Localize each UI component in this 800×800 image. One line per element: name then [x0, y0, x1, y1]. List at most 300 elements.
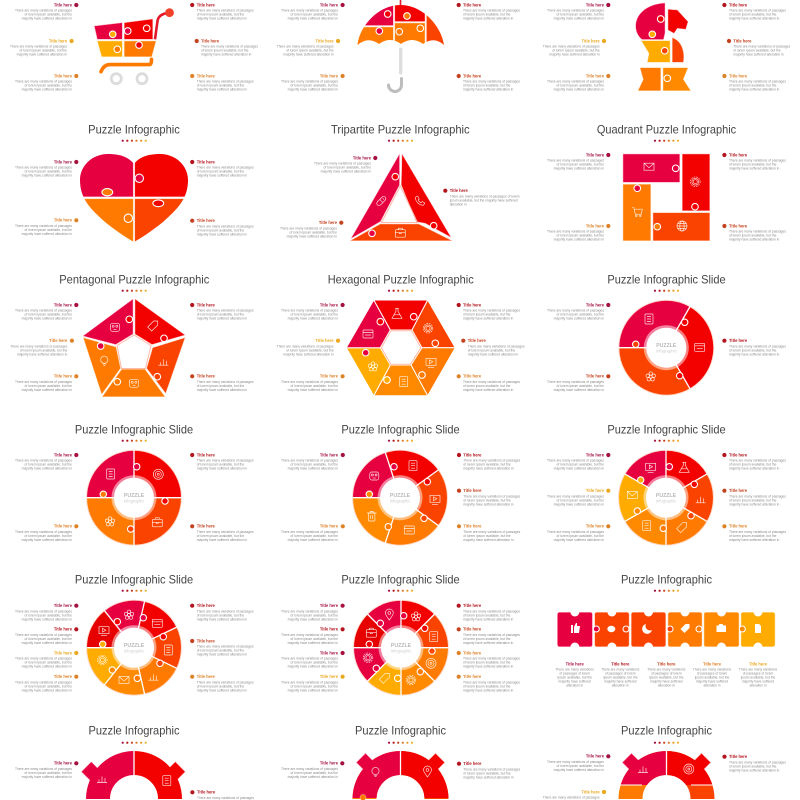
text block: left top: There are many variations of passages [281, 309, 338, 313]
text block: left 1: There are many variations of passages [281, 609, 338, 613]
panel: four part ring [15, 422, 254, 546]
icon: list [409, 461, 417, 471]
text block: right 2: of lorem ipsum available, but the [197, 649, 244, 653]
text block: right top [722, 452, 786, 471]
text block: left bottom: of lorem ipsum available, but the [557, 84, 604, 88]
text block: left bottom: There are many variations of passages [281, 380, 338, 384]
text block: left top [547, 452, 610, 471]
text block: left top: majority have suffered alteration in [554, 467, 604, 471]
text block: left 3: Title here [54, 650, 73, 655]
icon: grid [148, 674, 158, 680]
heading: Puzzle Infographic Slide [607, 422, 726, 436]
heading: Hexagonal Puzzle Infographic [328, 272, 474, 286]
text block: left middle: There are many variations of passages [543, 45, 600, 49]
label: step 2: There are many variations [601, 667, 640, 671]
text block: right 4: There are many variations of passages [463, 680, 520, 684]
text block: right top: of lorem ipsum available, but the [197, 313, 244, 317]
text block: bottom left: majority have suffered alteration in [287, 234, 337, 238]
text block: right bottom [457, 524, 521, 542]
text block: right top: of lorem ipsum available, but the [463, 13, 511, 17]
text block: left 1: of lorem ipsum available, but the [291, 613, 338, 617]
heading: Quadrant Puzzle Infographic [597, 122, 736, 136]
text block: right: alteration in [450, 202, 467, 206]
text block: right 1: majority have suffered alteration in [197, 617, 247, 621]
icon: briefcase [152, 518, 162, 527]
text block: left 1 [281, 603, 345, 621]
text block: right 2: of lorem ipsum available, but the [463, 637, 511, 641]
text block: left top: of lorem ipsum available, but the [25, 13, 72, 17]
text block: left bottom [547, 223, 610, 242]
text block: right 1: Title here [463, 603, 482, 608]
text block: left 3: There are many variations of passages [15, 657, 72, 661]
text block: right bottom: Title here [197, 73, 216, 78]
text block: left middle: of lorem ipsum available, but the [20, 348, 67, 352]
text block: right top: There are many variations of passages [463, 459, 521, 463]
label: step 4 [693, 661, 731, 687]
panel: shopping cart puzzle [10, 2, 258, 92]
text block: left middle: majority have suffered alteration in [283, 53, 334, 57]
heading: Puzzle Infographic [621, 572, 712, 586]
text block: left 4: Title here [320, 674, 339, 679]
text block: right top: There are many variations of passages [197, 309, 254, 313]
text block: right middle: majority have suffered alteration in [733, 53, 784, 57]
pentagon chart [83, 299, 185, 397]
heading dots [388, 742, 413, 744]
text block: left top: of lorem ipsum available, but the [25, 463, 72, 467]
icon: gear [690, 177, 700, 186]
text block: right top: of lorem ipsum available, but the [729, 13, 777, 17]
text block: left 1 [15, 603, 78, 621]
text block: left bottom [547, 73, 610, 92]
text block: left top: of lorem ipsum available, but the [557, 463, 604, 467]
text block: left bottom: Title here [54, 524, 73, 529]
ring chart: Infographic [124, 648, 144, 653]
ring chart [86, 450, 182, 546]
text block: right [722, 338, 786, 356]
text block: right middle: Title here [733, 38, 752, 43]
text block: left middle [10, 38, 74, 57]
text block: left top: There are many variations of passages [547, 159, 604, 163]
text block: left middle: There are many variations of passages [10, 344, 68, 348]
text block: right top: Title here [197, 452, 216, 457]
text block: right bottom [190, 218, 254, 236]
text block: right top: of lorem ipsum available, but the [463, 313, 511, 317]
text block: right top: Title here [463, 2, 482, 7]
text block: right bottom: of lorem ipsum available, but the [197, 228, 244, 232]
text block: left top: of lorem ipsum available, but the [557, 13, 604, 17]
text block: left top: majority have suffered alteration in [554, 17, 604, 21]
text block: right bottom: Title here [463, 524, 482, 529]
text block: left bottom: of lorem ipsum available, but the [291, 384, 338, 388]
text block: right 3 [190, 674, 254, 692]
text block: right top: Title here [463, 302, 482, 307]
icon: face lower [130, 379, 138, 387]
panel: arch puzzle right [543, 723, 786, 800]
text block: right top: majority have suffered alteration in [729, 167, 780, 171]
text block: left 4: There are many variations of passages [15, 680, 72, 684]
text block: left 3: of lorem ipsum available, but the [25, 661, 72, 665]
label: step 4: majority have suffered [696, 679, 728, 683]
text block: right bottom: Title here [729, 524, 748, 529]
ring chart [86, 600, 182, 695]
text block: left 2: Title here [54, 627, 73, 632]
text block: right 1 [190, 603, 254, 621]
text block: right top: of lorem ipsum available, but the [197, 170, 244, 174]
label: step 1: majority have suffered [559, 679, 591, 683]
text block: right middle: majority have suffered alteration in [201, 53, 252, 57]
icon: face [110, 323, 120, 331]
text block: right top: There are many variations of passages [197, 459, 254, 463]
text block: left top: There are many variations of passages [15, 166, 72, 170]
icon: tag [148, 321, 158, 331]
heading: Puzzle Infographic Slide [341, 572, 460, 586]
text block: left top: Title here [586, 302, 605, 307]
icon: growth chart [638, 766, 648, 772]
icon: flower [646, 372, 655, 381]
text block: left middle [543, 38, 606, 57]
text block: left middle: majority have suffered alteration in [554, 502, 604, 506]
text block: left bottom: of lorem ipsum available, but the [25, 228, 72, 232]
heading: Puzzle Infographic Slide [341, 422, 460, 436]
panel: five part ring [281, 422, 521, 545]
heading dots [122, 440, 147, 442]
heading: Puzzle Infographic Slide [607, 272, 726, 286]
icon: piggy bank [607, 626, 615, 632]
text block: right top: of lorem ipsum available, but the [197, 463, 244, 467]
text block: left top: of lorem ipsum available, but the [557, 163, 604, 167]
text block: left top: There are many variations of passages [15, 309, 72, 313]
label: step 1: alteration in [566, 683, 583, 687]
umbrella canopy [355, 0, 446, 47]
text block: right bottom [190, 524, 254, 542]
text block: left bottom: Title here [586, 223, 605, 228]
text block: right 4: majority have suffered alteration in [463, 688, 514, 692]
text block: left middle: majority have suffered alteration in [549, 53, 600, 57]
text block: left 3: Title here [320, 650, 339, 655]
text block: left middle [277, 38, 340, 57]
text block: left middle [277, 338, 340, 356]
text block: right bottom: of lorem ipsum available, but the [463, 534, 511, 538]
heading dots [388, 440, 413, 442]
text block: left 1: majority have suffered alteration in [288, 617, 338, 621]
panel: quadrant puzzle [547, 122, 786, 242]
text block: left top: There are many variations of passages [547, 459, 604, 463]
icon: moon [642, 624, 652, 634]
text block: left 3 [15, 650, 78, 669]
heading dots [388, 140, 413, 142]
text block: left 2 [281, 627, 345, 645]
icon: window [404, 526, 414, 534]
text block: right middle: of lorem ipsum available, but the [468, 348, 515, 352]
text block: left bottom [15, 73, 78, 92]
text block: right middle [722, 488, 786, 506]
ring chart [352, 450, 448, 545]
text block: right middle: There are many variations of passages [463, 494, 521, 498]
text block: left top: There are many variations of passages [547, 9, 604, 13]
label: step 4: There are many variations [693, 667, 731, 671]
text block: right top: majority have suffered alteration in [729, 467, 780, 471]
text block: right bottom: There are many variations of passages [729, 530, 786, 534]
text block: right top: of lorem ipsum available, but the [729, 163, 777, 167]
text block: right 4: of lorem ipsum available, but the [463, 684, 511, 688]
text block: right bottom: of lorem ipsum available, but the [197, 534, 244, 538]
icon: camera [98, 655, 107, 665]
text block: left top: majority have suffered alteration in [22, 17, 72, 21]
text block: left top [547, 754, 610, 772]
text block: right top: majority have suffered alteration in [197, 174, 247, 178]
text block: right top [190, 302, 254, 321]
text block: right bottom: majority have suffered alteration in [197, 88, 247, 92]
text block: right top: Title here [729, 2, 748, 7]
arch chart [81, 750, 185, 800]
heading dots [122, 742, 147, 744]
text block: right middle: of lorem ipsum available, but the [463, 498, 511, 502]
icon: trash [367, 512, 376, 521]
text block: left bottom: of lorem ipsum available, but the [25, 84, 72, 88]
knight figure [636, 3, 691, 91]
text block: right: majority have suffered alteration in [463, 775, 514, 779]
label: step 3 [647, 661, 686, 687]
icon: document [430, 632, 438, 642]
text block: right 2: majority have suffered alteration in [197, 653, 247, 657]
text block: left middle: of lorem ipsum available, but the [286, 348, 334, 352]
icon: document [164, 645, 172, 655]
text block: right 2: Title here [197, 638, 216, 643]
text block: left bottom: Title here [54, 374, 73, 379]
text block: right top: majority have suffered alteration in [463, 317, 514, 321]
panel: three part ring [547, 272, 786, 395]
text block: right top [457, 2, 520, 21]
text block: left bottom: There are many variations of passages [281, 530, 338, 534]
panel: eight part ring [281, 572, 520, 696]
text block: right top: of lorem ipsum available, but the [463, 463, 511, 467]
text block: right top: majority have suffered alteration in [197, 467, 247, 471]
text block: right bottom: majority have suffered alteration in [463, 538, 514, 542]
text block: left top: of lorem ipsum available, but the [557, 764, 604, 768]
text block: left: There are many variations of passages [281, 767, 338, 771]
label: step 4: of passages of lorem [697, 671, 728, 675]
ring chart: Infographic [656, 498, 676, 503]
text block: right top: Title here [197, 302, 216, 307]
text block: left top: Title here [320, 302, 339, 307]
ring chart: Infographic [390, 498, 410, 503]
text block: left lower: There are many variations of passages [543, 796, 600, 800]
puzzle chain [557, 608, 775, 652]
text block: right: There are many variations of passages [729, 344, 786, 348]
icon: monitor [99, 627, 109, 636]
text block: left middle: of lorem ipsum available, but the [552, 49, 600, 53]
text block: left top: There are many variations of passages [281, 9, 338, 13]
text block: right bottom: majority have suffered alteration in [197, 232, 247, 236]
text block: left top: of lorem ipsum available, but the [291, 463, 338, 467]
icon: flask [392, 308, 402, 318]
heading: Tripartite Puzzle Infographic [331, 122, 470, 136]
text block: left bottom: majority have suffered alteration in [554, 238, 604, 242]
text block: right middle [195, 38, 258, 57]
text block: right bottom: Title here [729, 223, 748, 228]
label: step 3: alteration in [658, 683, 675, 687]
text block: right bottom [722, 223, 786, 242]
panel: arch puzzle left [15, 723, 254, 800]
panel: chess knight puzzle [543, 2, 791, 92]
text block: left 3: majority have suffered alteration in [288, 665, 338, 669]
text block: left top: There are many variations of passages [547, 309, 604, 313]
text block: right 2: There are many variations of passages [463, 633, 520, 637]
icon: mail [644, 163, 654, 170]
text block: right 2 [190, 638, 254, 657]
text block: left top: There are many variations of passages [15, 9, 72, 13]
text block: right middle [457, 488, 521, 506]
text block: right top [190, 452, 254, 471]
text block: left top: majority have suffered alteration in [554, 317, 604, 321]
ring knobs [632, 319, 688, 379]
text block: right top [190, 2, 254, 21]
text block: right [722, 754, 786, 772]
text block: left: Title here [54, 761, 73, 766]
icon: chart [158, 359, 168, 365]
text block: left 2: of lorem ipsum available, but the [291, 637, 338, 641]
text block: left bottom [15, 218, 78, 236]
heading: Puzzle Infographic Slide [75, 422, 193, 436]
text block: left 1: majority have suffered alteration in [22, 617, 72, 621]
text block: left top [281, 2, 345, 21]
heading: Pentagonal Puzzle Infographic [59, 272, 209, 286]
text block: left bottom: of lorem ipsum available, but the [291, 534, 338, 538]
text block: left bottom [281, 524, 345, 542]
label: step 5: There are many variations [739, 667, 777, 671]
text block: bottom left: There are many variations of passages [280, 226, 337, 230]
heading dots [122, 290, 147, 292]
icon: document [107, 469, 115, 479]
text block: right middle: There are many variations of passages [729, 494, 786, 498]
label: step 2: of passages of lorem [605, 671, 636, 675]
icon: play [646, 463, 656, 472]
text block: top left: majority have suffered alteration in [321, 170, 371, 174]
text block: left top: majority have suffered alteration in [554, 167, 604, 171]
text block: left bottom: majority have suffered alteration in [22, 388, 72, 392]
panel: seven part ring [15, 572, 254, 695]
text block: right top: Title here [197, 2, 216, 7]
text block: left 4: There are many variations of passages [281, 680, 338, 684]
text block: left top: There are many variations of passages [281, 459, 338, 463]
text block: left top: Title here [54, 302, 73, 307]
text block: left bottom [15, 524, 78, 542]
text block: left bottom: of lorem ipsum available, but the [291, 84, 338, 88]
text block: left top: of lorem ipsum available, but the [25, 170, 72, 174]
text block: right top: majority have suffered alteration in [197, 317, 247, 321]
text block: right top: There are many variations of passages [729, 159, 786, 163]
heading dots [654, 290, 679, 292]
text block: right bottom: majority have suffered alteration in [463, 388, 514, 392]
text block: left middle: of lorem ipsum available, but the [557, 498, 604, 502]
text block: left bottom [281, 374, 345, 392]
text block: right: There are many variations of passages [729, 760, 786, 764]
text block: left top: majority have suffered alteration in [554, 768, 604, 772]
heading dots [654, 140, 679, 142]
ring chart: PUZZLE [124, 493, 145, 499]
text block: left bottom [15, 374, 78, 392]
label: step 2: alteration in [612, 683, 629, 687]
ring chart [353, 600, 449, 696]
text block: left 4 [15, 674, 78, 692]
text block: left bottom: of lorem ipsum available, but the [557, 534, 604, 538]
icon: window [152, 619, 162, 627]
text block: left middle: Title here [586, 488, 605, 493]
text block: left bottom: There are many variations of passages [15, 80, 72, 84]
text block: left top: of lorem ipsum available, but the [291, 313, 338, 317]
icon: target [426, 658, 436, 668]
text block: right top [457, 452, 521, 471]
panel: pentagonal puzzle [10, 272, 254, 397]
text block: right middle: Title here [201, 38, 220, 43]
text block: right middle: There are many variations of passages [468, 344, 525, 348]
text block: bottom left: of lorem ipsum available, but the [290, 230, 337, 234]
text block: left top [281, 452, 345, 471]
label: step 4: alteration in [703, 683, 721, 687]
panel: six part ring [547, 422, 786, 546]
text block: right bottom: There are many variations of passages [729, 230, 786, 234]
text block: right: Title here [729, 338, 748, 343]
umbrella handle [388, 49, 402, 92]
text block: right bottom: of lorem ipsum available, but the [197, 84, 244, 88]
text block: left top: Title here [586, 152, 605, 157]
text block: left middle: There are many variations of passages [277, 45, 334, 49]
text block: right middle: Title here [729, 488, 748, 493]
text block: left [15, 761, 78, 779]
ring chart: PUZZLE [656, 493, 677, 499]
text block: right top: of lorem ipsum available, but the [197, 13, 244, 17]
icon: globe [677, 221, 687, 231]
icon: chart [97, 776, 107, 782]
text block: left bottom: of lorem ipsum available, but the [557, 234, 604, 238]
text block: right top: There are many variations of passages [197, 166, 254, 170]
text block: left 4: Title here [54, 674, 73, 679]
label: step 1: There are many variations [556, 667, 594, 671]
text block: right bottom: of lorem ipsum available, but the [729, 234, 777, 238]
text block: right 1: majority have suffered alteration in [463, 617, 514, 621]
icon: face [363, 653, 373, 662]
quadrant chart [623, 154, 710, 241]
text block: right top: of lorem ipsum available, but the [729, 463, 777, 467]
text block: left bottom: There are many variations of passages [15, 530, 72, 534]
text block: left top: Title here [54, 2, 73, 7]
text block: right middle [461, 338, 525, 356]
text block: left top [15, 2, 78, 21]
text block: right top: Title here [729, 452, 748, 457]
text block: right 3 [457, 650, 520, 669]
panel: tripartite puzzle [280, 122, 520, 241]
text block: left top [15, 159, 78, 178]
text block: right 3: majority have suffered alteration in [197, 688, 247, 692]
text block: left middle: majority have suffered alteration in [17, 53, 67, 57]
icon: flower [124, 610, 134, 619]
text block: right bottom [722, 73, 786, 92]
heading: Puzzle Infographic [355, 723, 446, 737]
text block: top left: There are many variations of passages [314, 162, 371, 166]
text block: right: ipsum available, but the majority have suffered [450, 198, 518, 202]
text block: left middle: majority have suffered alteration in [283, 352, 334, 356]
text block: right: majority have suffered alteration in [729, 352, 780, 356]
text block: left top: Title here [586, 754, 605, 759]
text block: right 3: There are many variations of passages [463, 657, 520, 661]
text block: left 4: of lorem ipsum available, but the [25, 684, 72, 688]
text block: right 4: Title here [463, 674, 482, 679]
text block: left 4: majority have suffered alteration in [22, 688, 72, 692]
text block: left bottom [281, 73, 345, 92]
text block: right top: There are many variations of passages [197, 9, 254, 13]
text block: right bottom: majority have suffered alteration in [197, 538, 247, 542]
text block: left top: Title here [320, 2, 339, 7]
